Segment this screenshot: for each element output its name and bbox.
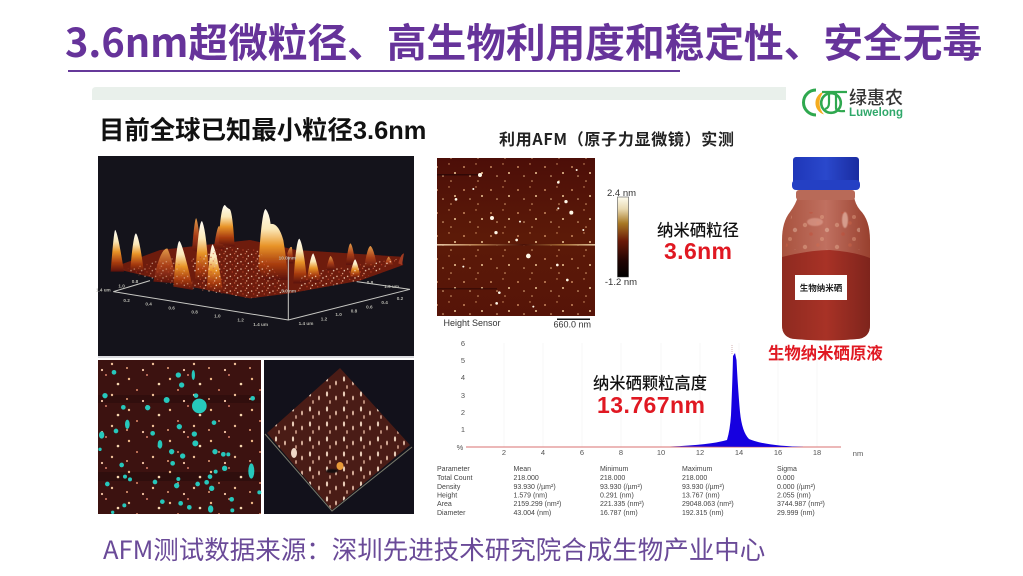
data table: parameter statistics: 1.579 (nm)	[514, 492, 547, 500]
image: 3D AFM surface: 1.0 um	[384, 284, 399, 289]
callout: particle height	[593, 370, 707, 418]
chart: particle height distribution: 1	[461, 425, 465, 434]
data table: parameter statistics: Height	[437, 492, 457, 500]
data table: parameter statistics: 0.291 (nm)	[600, 492, 634, 500]
callout: particle height: 纳米硒颗粒高度	[593, 370, 707, 394]
title underline	[68, 70, 680, 72]
chart: particle height distribution: nm	[853, 449, 863, 458]
image: 3D AFM surface: 10.0 nm	[279, 256, 296, 261]
data table: parameter statistics: 43.004 (nm)	[514, 510, 551, 517]
image: 3D AFM surface: 0.8	[367, 280, 374, 285]
chart: particle height distribution: 8	[619, 448, 623, 457]
data table: parameter statistics	[437, 466, 825, 517]
image: 3D AFM surface: 5.0 nm	[281, 289, 296, 294]
heading: smallest particle size: 目前全球已知最小粒径3.6nm	[99, 111, 426, 147]
data table: parameter statistics: Sigma	[777, 466, 797, 473]
data table: parameter statistics: Mean	[514, 466, 531, 473]
title: 3.6nm超微粒径、高生物利用度和稳定性、安全无毒	[65, 12, 982, 69]
image: 3D AFM surface: 0.4	[381, 300, 388, 305]
image: 3D AFM surface: 0.6	[366, 304, 373, 309]
image: 3D AFM surface: 1.4 um	[253, 322, 268, 327]
chart: particle height distribution: 5	[461, 356, 465, 365]
data table: parameter statistics: 0.000	[777, 475, 795, 482]
data table: parameter statistics: 93.930 (/µm²)	[514, 484, 556, 491]
image: 3D AFM surface: 1.4 um	[299, 321, 313, 326]
data table: parameter statistics: 2.055 (nm)	[777, 492, 811, 500]
image: 3D AFM surface: 0.2	[397, 296, 404, 301]
image caption: height sensor and scale: Height Sensor	[444, 318, 501, 328]
data table: parameter statistics: 29048.063 (nm²)	[682, 501, 734, 508]
chart: particle height distribution: 10	[657, 448, 665, 457]
image: tilted 3D particle surface	[264, 360, 414, 514]
logo: Luwelong: Luwelong	[849, 107, 903, 119]
data table: parameter statistics: 218.000	[682, 475, 707, 482]
chart: particle height distribution: 6	[461, 339, 465, 348]
chart: particle height distribution: 2	[461, 408, 465, 417]
image: 3D AFM surface: 1.0	[214, 313, 221, 318]
image: 3D AFM surface: 1.4 um	[96, 287, 111, 292]
data table: parameter statistics: 93.930 (/µm²)	[682, 484, 724, 491]
photo: bottle of bio nano selenium: 生物纳米硒	[800, 282, 843, 294]
chart: particle height distribution: 18	[813, 448, 821, 457]
image caption: height sensor and scale: 660.0 nm	[554, 320, 591, 330]
image: 3D AFM surface: 0.6	[168, 305, 175, 310]
callout: particle size: 纳米硒粒径	[657, 217, 739, 241]
data table: parameter statistics: Density	[437, 484, 461, 491]
image: 3D AFM surface: 0.8	[191, 309, 198, 314]
colour scale bar: -1.2 nm	[605, 277, 637, 288]
data table: parameter statistics: 93.930 (/µm²)	[600, 484, 642, 491]
label: bottle name: 生物纳米硒原液	[768, 340, 883, 364]
data table: parameter statistics: 29.999 (nm)	[777, 510, 815, 517]
image: 3D AFM surface: 1.2	[321, 317, 328, 322]
data table: parameter statistics: 13.767 (nm)	[682, 492, 720, 500]
image: 3D AFM surface: 1.2	[237, 317, 244, 322]
data table: parameter statistics: 221.335 (nm²)	[600, 501, 644, 508]
data table: parameter statistics: Diameter	[437, 510, 466, 517]
footer: data source: AFM测试数据来源：深圳先进技术研究院合成生物产业中心	[103, 530, 765, 567]
data table: parameter statistics: Maximum	[682, 466, 713, 473]
data table: parameter statistics: 192.315 (nm)	[682, 510, 724, 517]
colour scale bar: 2.4 nm	[607, 188, 636, 199]
image: 3D AFM surface: 1.0	[335, 312, 342, 317]
data table: parameter statistics: 218.000	[600, 475, 625, 482]
chart: particle height distribution: 4	[461, 373, 465, 382]
image: 3D AFM surface: 0.8	[132, 279, 139, 284]
data table: parameter statistics: 2159.299 (nm²)	[514, 501, 561, 508]
chart: particle height distribution	[457, 339, 863, 458]
chart: particle height distribution: 12	[696, 448, 704, 457]
logo: Luwelong	[804, 84, 903, 119]
image: particle map with cyan clusters	[98, 360, 261, 514]
green header strip	[92, 87, 786, 100]
image caption: height sensor and scale	[444, 318, 591, 330]
data table: parameter statistics: 16.787 (nm)	[600, 510, 638, 517]
chart: particle height distribution: 6	[580, 448, 584, 457]
data table: parameter statistics: 0.000 (/µm²)	[777, 484, 815, 491]
data table: parameter statistics: 218.000	[514, 475, 539, 482]
image: AFM height map	[437, 158, 595, 316]
photo: bottle of bio nano selenium	[782, 157, 870, 340]
chart: particle height distribution: 14	[735, 448, 743, 457]
image: 3D AFM surface: 0.4	[145, 302, 152, 307]
chart: particle height distribution: 2	[502, 448, 506, 457]
chart: particle height distribution: %	[457, 443, 464, 452]
data table: parameter statistics: Minimum	[600, 466, 629, 473]
callout: particle size	[657, 217, 739, 264]
heading: AFM measurement: 利用AFM（原子力显微镜）实测	[499, 126, 734, 150]
chart: particle height distribution: 16	[774, 448, 782, 457]
chart: particle height distribution: 3	[461, 391, 465, 400]
data table: parameter statistics: 3744.987 (nm²)	[777, 501, 825, 508]
chart: particle height distribution: 4	[541, 448, 545, 457]
image: 3D AFM surface: 0.2	[123, 298, 130, 303]
callout: particle height: 13.767nm	[597, 392, 705, 418]
image: 3D AFM surface	[96, 156, 414, 358]
image: 3D AFM surface: 0.8	[351, 309, 358, 314]
image: 3D AFM surface: 1.0	[118, 283, 125, 288]
colour scale bar	[605, 188, 637, 288]
data table: parameter statistics: Parameter	[437, 466, 470, 473]
data table: parameter statistics: Area	[437, 501, 452, 508]
logo: Luwelong: 绿惠农	[849, 84, 903, 110]
data table: parameter statistics: Total Count	[437, 475, 472, 482]
callout: particle size: 3.6nm	[664, 238, 732, 264]
